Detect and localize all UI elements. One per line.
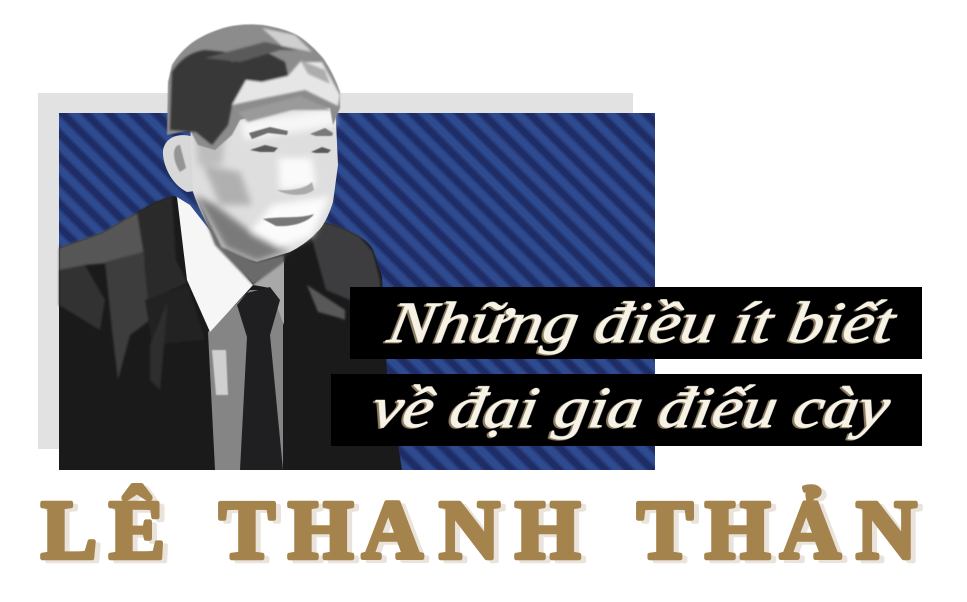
portrait: tie: [237, 287, 283, 470]
name: THẢN: THẢN: [637, 484, 917, 577]
portrait: shirt highlight: [212, 350, 228, 395]
portrait: ear: [163, 135, 203, 192]
portrait: eyebrows: [249, 127, 288, 139]
black banner 1: [350, 287, 922, 359]
black banner 2: [331, 374, 922, 446]
portrait: hair: [167, 24, 340, 150]
portrait: face shading: [195, 108, 335, 262]
portrait of Lê Thanh Thản: [59, 24, 402, 470]
portrait: lower neck shadow: [196, 196, 284, 285]
grey backing panel: [38, 93, 633, 449]
name: THANH: THANH: [219, 484, 580, 577]
portrait: shirt front: [208, 290, 283, 470]
portrait: jacket: [59, 196, 402, 470]
name title: [41, 484, 917, 577]
portrait: face: [190, 100, 338, 262]
script heading line 2: về đại gia điếu cày: [368, 375, 895, 440]
name: LÊ: LÊ: [41, 484, 165, 577]
portrait: nose shadow: [277, 182, 314, 195]
portrait: mouth: [263, 214, 314, 226]
script heading line 1: Những điều ít biết: [383, 290, 902, 355]
portrait: right collar: [253, 258, 284, 325]
portrait: hair texture: [170, 28, 340, 145]
portrait: eyes: [250, 145, 278, 152]
portrait: white shirt collar: [177, 197, 253, 332]
portrait: jacket shading: [59, 197, 382, 390]
blue striped panel: [59, 113, 655, 470]
